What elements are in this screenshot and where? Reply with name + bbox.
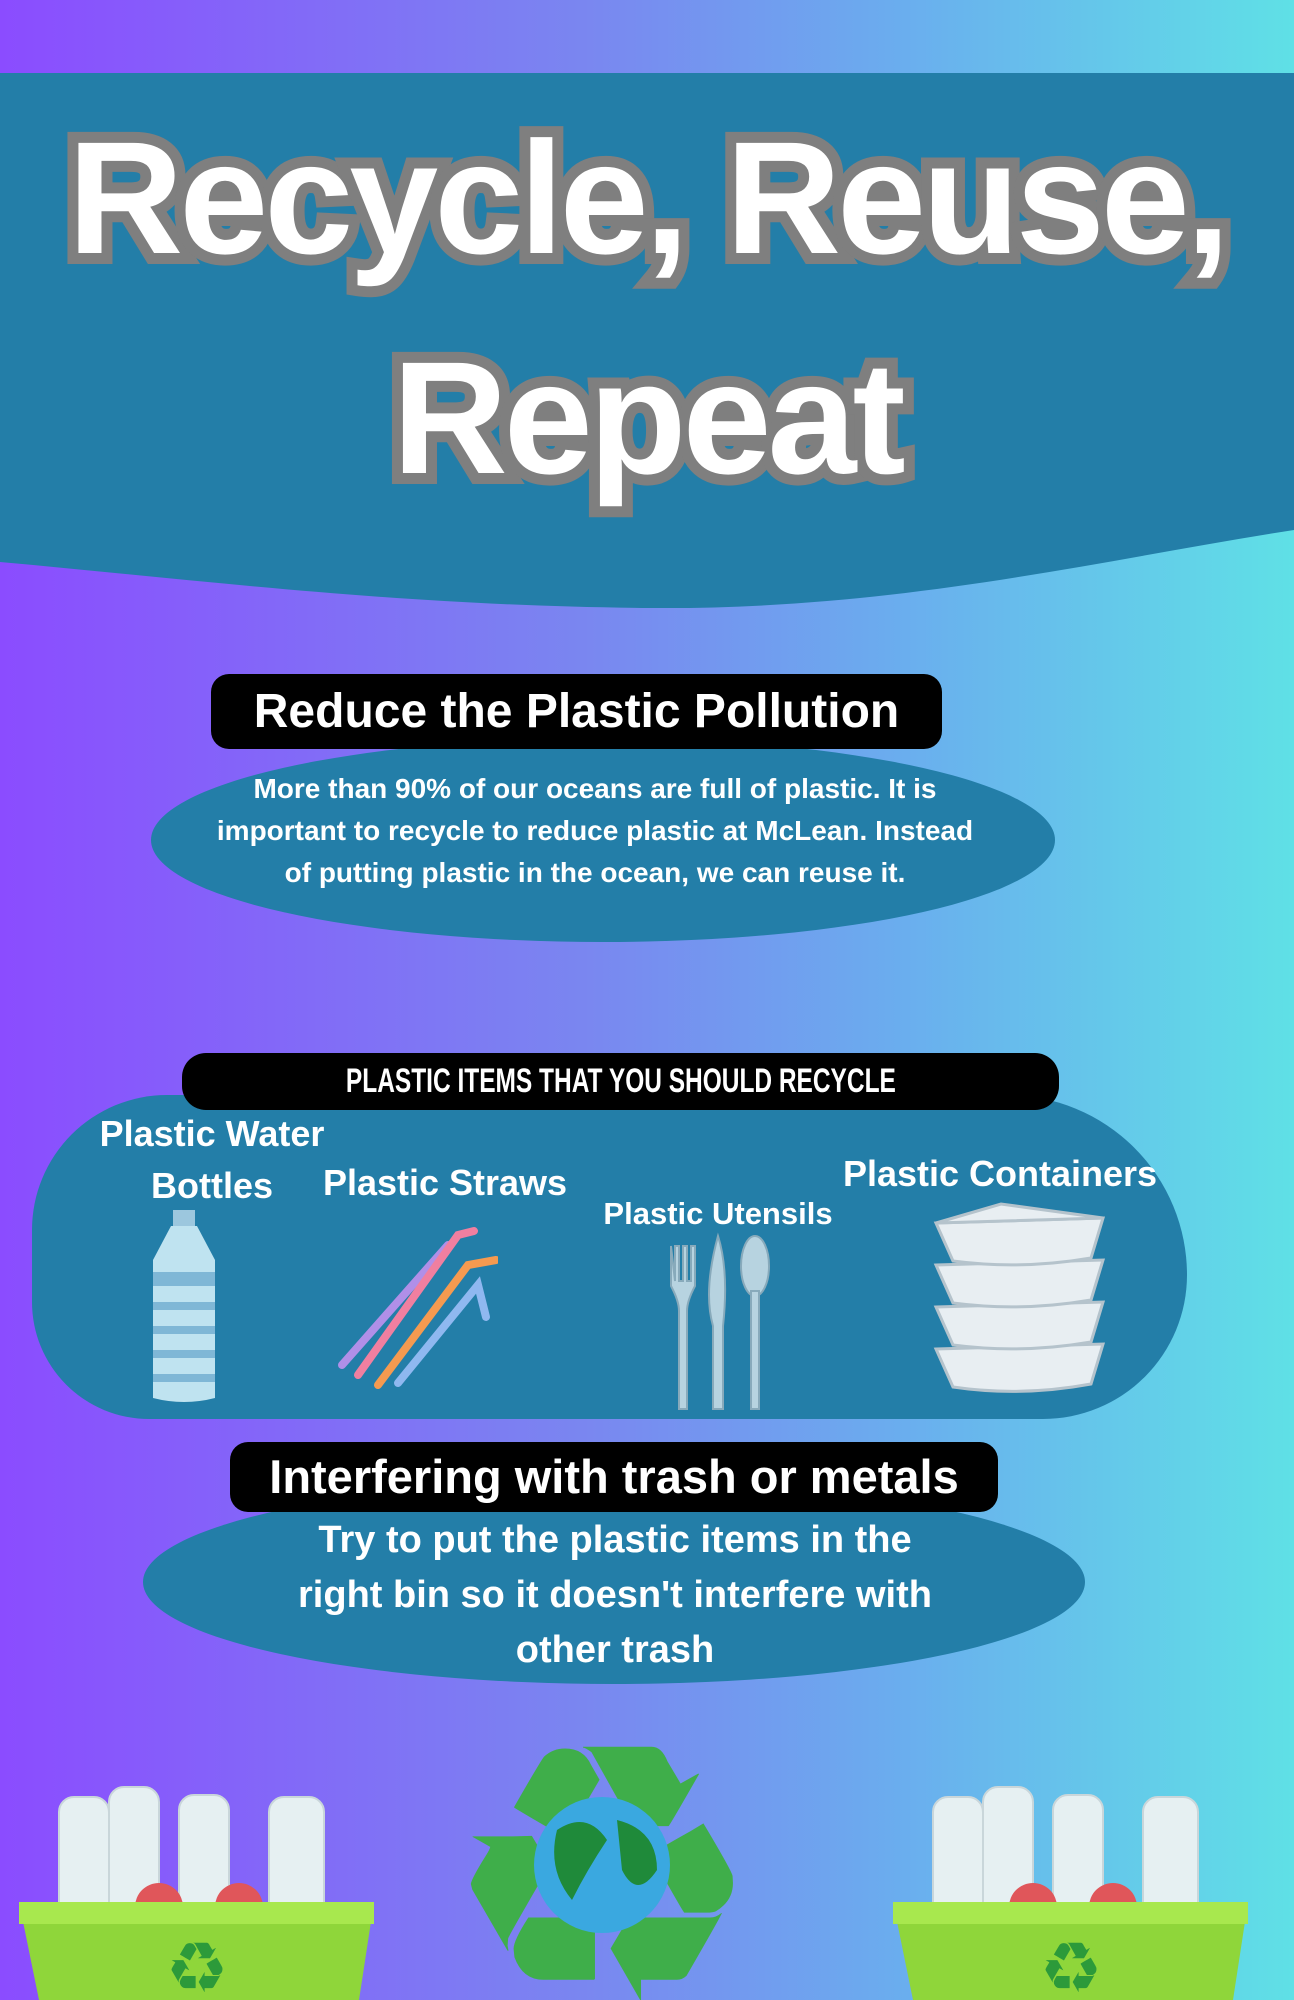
heading: interfering: Interfering with trash or metals <box>269 1450 959 1503</box>
blob: interfering <box>143 1480 1085 1684</box>
header band <box>0 73 1294 608</box>
icon: right recycling bin <box>893 1786 1248 2000</box>
label: water bottles <box>100 1113 324 1206</box>
heading: reduce plastic: Reduce the Plastic Pollution <box>254 685 899 738</box>
heading: plastic items <box>182 1053 1059 1110</box>
label: utensils: Plastic Utensils <box>603 1196 833 1231</box>
icon: straws <box>338 1227 498 1389</box>
icon: left recycling bin <box>19 1786 374 2000</box>
text: reduce plastic: More than 90% of our oceans are full of plastic. It is important to recycle to reduce plastic at McLean. Instead of putting plastic in the ocean, we can reuse it. <box>217 773 973 888</box>
icon: containers <box>934 1202 1105 1393</box>
panel: plastic items <box>32 1095 1187 1419</box>
blob: reduce plastic <box>151 738 1055 942</box>
label: water bottles: Plastic Water <box>100 1113 324 1154</box>
title: Recycle, Reuse, <box>68 108 1226 287</box>
text: interfering: Try to put the plastic items in the right bin so it doesn't interfere with other trash <box>298 1519 932 1671</box>
icon: water bottle <box>153 1210 215 1402</box>
title line 2: Repeat <box>392 328 902 507</box>
heading: interfering <box>230 1442 998 1512</box>
heading: reduce plastic <box>211 674 942 749</box>
label: straws: Plastic Straws <box>323 1162 567 1203</box>
icon: utensils <box>670 1232 770 1410</box>
label: containers: Plastic Containers <box>843 1153 1157 1194</box>
label: water bottles: Bottles <box>151 1165 273 1206</box>
heading: plastic items: PLASTIC ITEMS THAT YOU SHOULD RECYCLE <box>346 1062 895 1100</box>
